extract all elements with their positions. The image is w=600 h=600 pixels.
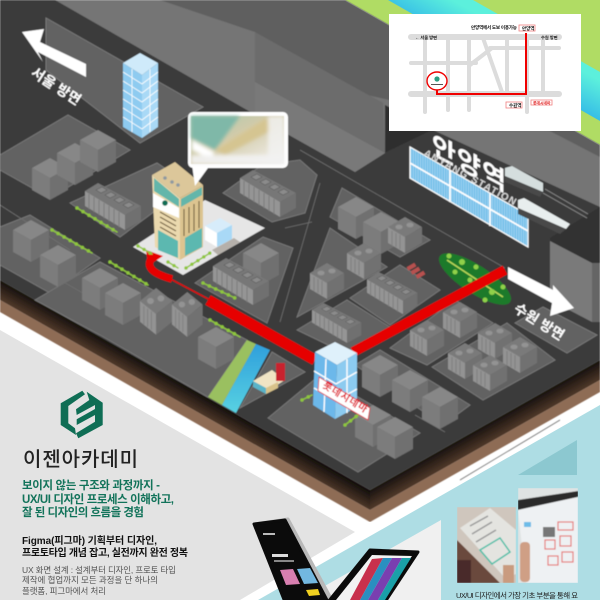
trains	[505, 166, 588, 234]
teal triangle accent	[518, 440, 577, 475]
popup bubble	[188, 112, 288, 186]
minimap label: bus stop	[506, 102, 522, 109]
minimap label: bus stop: 수원역	[509, 102, 521, 109]
target lot	[133, 200, 265, 275]
target academy building	[152, 162, 203, 260]
small white annex	[205, 218, 240, 255]
label: Seoul direction: 서울 방면	[28, 64, 84, 108]
lotte tower	[313, 342, 370, 420]
photo: tablet wireframe	[518, 488, 578, 583]
river and green bank	[208, 340, 270, 413]
brand name: 이젠아카데미	[23, 448, 138, 471]
minimap label: station: 안양역	[522, 25, 534, 32]
background: light triangle panel	[300, 520, 441, 600]
green headline: 보이지 않는 구조와 과정까지 -	[22, 478, 160, 492]
arrow: to Suwon	[508, 267, 574, 316]
minimap label: cinema: 롯데시네마	[533, 100, 551, 106]
background: green corner	[345, 0, 600, 145]
large gray rear blocks	[55, 0, 600, 207]
gray description: 플랫폼, 피그마에서 처리	[22, 586, 106, 596]
station signboard	[410, 130, 528, 247]
city blocks	[0, 18, 597, 472]
plate brown base	[0, 300, 600, 522]
label: Suwon direction: 수원 방면	[511, 300, 567, 343]
plate right side	[370, 360, 600, 510]
phone: colorful screen	[328, 550, 418, 600]
park	[432, 244, 518, 314]
green headline: 잘 된 디자인의 흐름을 경험	[22, 505, 144, 519]
minimap label: Seoul: ← 서울 방면	[415, 34, 437, 41]
arrow: to Seoul	[22, 29, 86, 77]
black subheading: 프로토타입 개념 잡고, 실전까지 완전 정복	[22, 546, 188, 559]
red cars	[407, 263, 425, 279]
gray description	[22, 565, 176, 596]
background: teal lower-right panel	[258, 405, 600, 600]
background: gray lower-left panel	[0, 330, 355, 600]
minimap caption: 안양역에서 도보 이용가능	[471, 24, 518, 31]
green headline: UX/UI 디자인 프로세스 이해하고,	[22, 493, 174, 506]
tree rows	[52, 208, 358, 425]
phone: dark app screen	[254, 519, 333, 600]
minimap route	[437, 33, 526, 94]
lotte cinema store	[253, 363, 285, 394]
gray description: UX 화면 설계 : 설계부터 디자인, 프로토 타입	[22, 565, 176, 575]
logo	[61, 391, 103, 438]
blue tower	[123, 53, 158, 138]
station glass panel	[410, 147, 528, 247]
black subheading	[22, 534, 188, 559]
photo caption: UX/UI 디자인에서 가장 기초 부분을 통해 요	[456, 590, 578, 600]
minimap label: station	[519, 25, 535, 32]
lotte cinema sign: 롯데시네마	[320, 378, 370, 415]
station english name: ANYANG STATION	[422, 148, 518, 208]
minimap label: Suwon: 수원 방면	[541, 34, 558, 41]
minimap roads	[411, 37, 559, 112]
right edge building	[550, 207, 600, 322]
location minimap	[389, 14, 581, 131]
minimap location marker	[427, 72, 447, 90]
minimap label: cinema	[531, 100, 552, 106]
black subheading: Figma(피그마) 기획부터 디자인,	[22, 534, 157, 547]
road markings	[0, 150, 560, 480]
red route	[146, 250, 505, 360]
green headline	[22, 478, 174, 519]
gray buildings	[13, 130, 537, 459]
background: blue stripe	[388, 0, 600, 121]
station name: 안양역	[432, 130, 506, 198]
plate left side	[0, 280, 370, 510]
gray description: 제작에 협업까지 모든 과정을 단 하나의	[22, 575, 158, 585]
photo: wireframe sketch	[457, 507, 516, 583]
